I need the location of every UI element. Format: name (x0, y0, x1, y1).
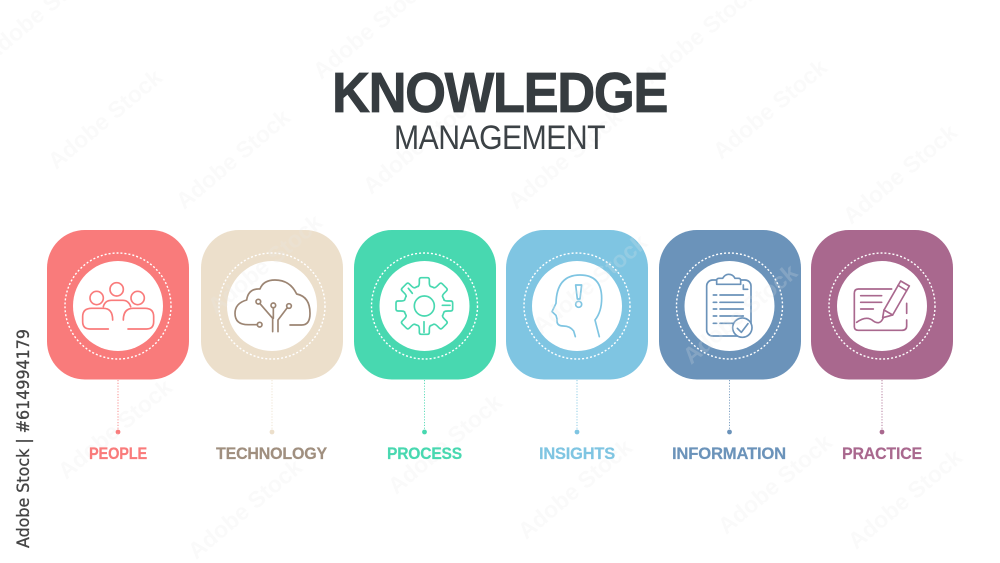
watermark: Adobe Stock (843, 444, 967, 554)
panel: technology (201, 230, 343, 434)
panel: process (354, 230, 496, 434)
label: information: INFORMATION (672, 444, 786, 463)
watermark: Adobe Stock (203, 209, 327, 319)
icon: cloud circuit (235, 280, 310, 332)
watermark: Adobe Stock (358, 89, 482, 199)
label: practice: PRACTICE (842, 444, 922, 463)
connector: people (116, 380, 120, 434)
watermark: Adobe Stock (53, 374, 177, 484)
credit text: Adobe Stock | #614994179 (14, 329, 34, 548)
icon: head with exclamation (552, 275, 602, 337)
title (332, 61, 667, 157)
watermark: Adobe Stock (713, 429, 837, 539)
watermark: Adobe Stock (708, 54, 832, 164)
watermark: Adobe Stock (678, 259, 802, 369)
panel: insights (506, 230, 648, 434)
icon: clipboard with check (707, 274, 752, 337)
icon: pencil writing on card (854, 281, 909, 330)
watermark: Adobe Stock (171, 104, 295, 214)
label: process: PROCESS (387, 444, 462, 463)
watermark: Adobe Stock (183, 454, 307, 563)
icon: people group (83, 283, 154, 329)
connector: information (727, 380, 732, 434)
watermark: Adobe Stock (383, 389, 507, 499)
watermark: Adobe Stock (513, 434, 637, 544)
watermark: Adobe Stock (838, 119, 962, 229)
connector: technology (270, 380, 274, 434)
label: people: PEOPLE (89, 444, 147, 463)
label: insights: INSIGHTS (539, 444, 615, 463)
panel: practice (811, 230, 953, 434)
icon: gear (396, 278, 453, 334)
connector: practice (880, 380, 884, 434)
label: technology: TECHNOLOGY (216, 444, 328, 463)
watermark: Adobe Stock (43, 64, 167, 174)
heading: management: MANAGEMENT (394, 119, 605, 157)
watermark: Adobe Stock (503, 104, 627, 214)
heading: knowledge: KNOWLEDGE (332, 61, 667, 124)
panel: information (659, 230, 801, 434)
connector: process (422, 380, 427, 434)
panel: people (47, 230, 189, 434)
watermark: Adobe Stock (528, 229, 652, 339)
connector: insights (575, 380, 579, 434)
